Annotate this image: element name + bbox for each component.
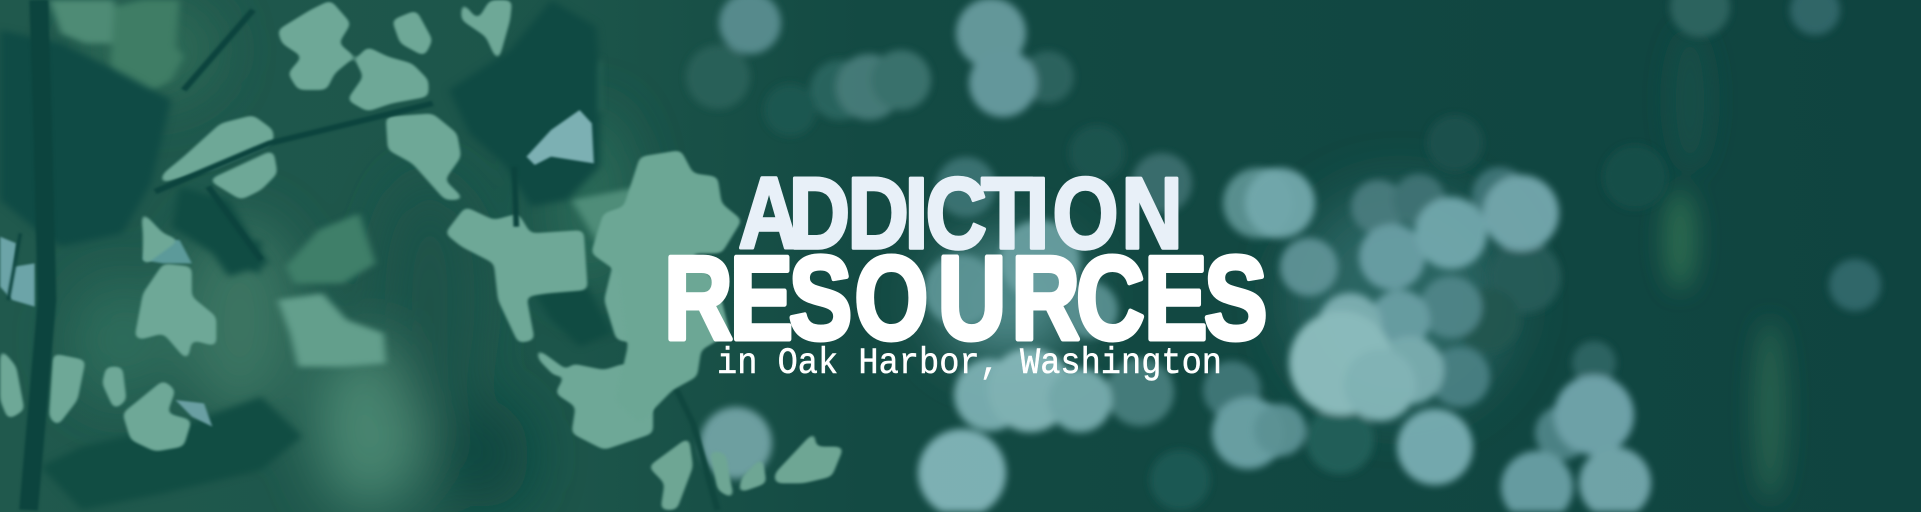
small bottom leaves [648, 430, 844, 510]
heading: RESOURCES: RESOURCES [664, 231, 1267, 364]
sky patches [0, 110, 594, 427]
subtitle: in Oak Harbor, Washington [717, 343, 1222, 385]
heading: ADDICTION: ADDICTION [738, 157, 1183, 270]
stems [8, 0, 516, 510]
soft background glow [70, 0, 1510, 510]
bokeh lights: right cluster [1245, 0, 1881, 512]
green streaks on the right [1664, 30, 1786, 500]
bokeh lights: centre [700, 125, 1293, 512]
stem [677, 390, 718, 510]
foliage: central oak leaf and stem [591, 150, 844, 510]
dark foliage masses [0, 0, 612, 510]
mid-tone upper left leaves [49, 0, 640, 367]
bokeh lights: top centre [686, 0, 1074, 136]
foliage: left branches and leaves [0, 0, 653, 510]
title [664, 157, 1267, 385]
oak leaf [591, 150, 742, 423]
light leaves [0, 0, 653, 452]
